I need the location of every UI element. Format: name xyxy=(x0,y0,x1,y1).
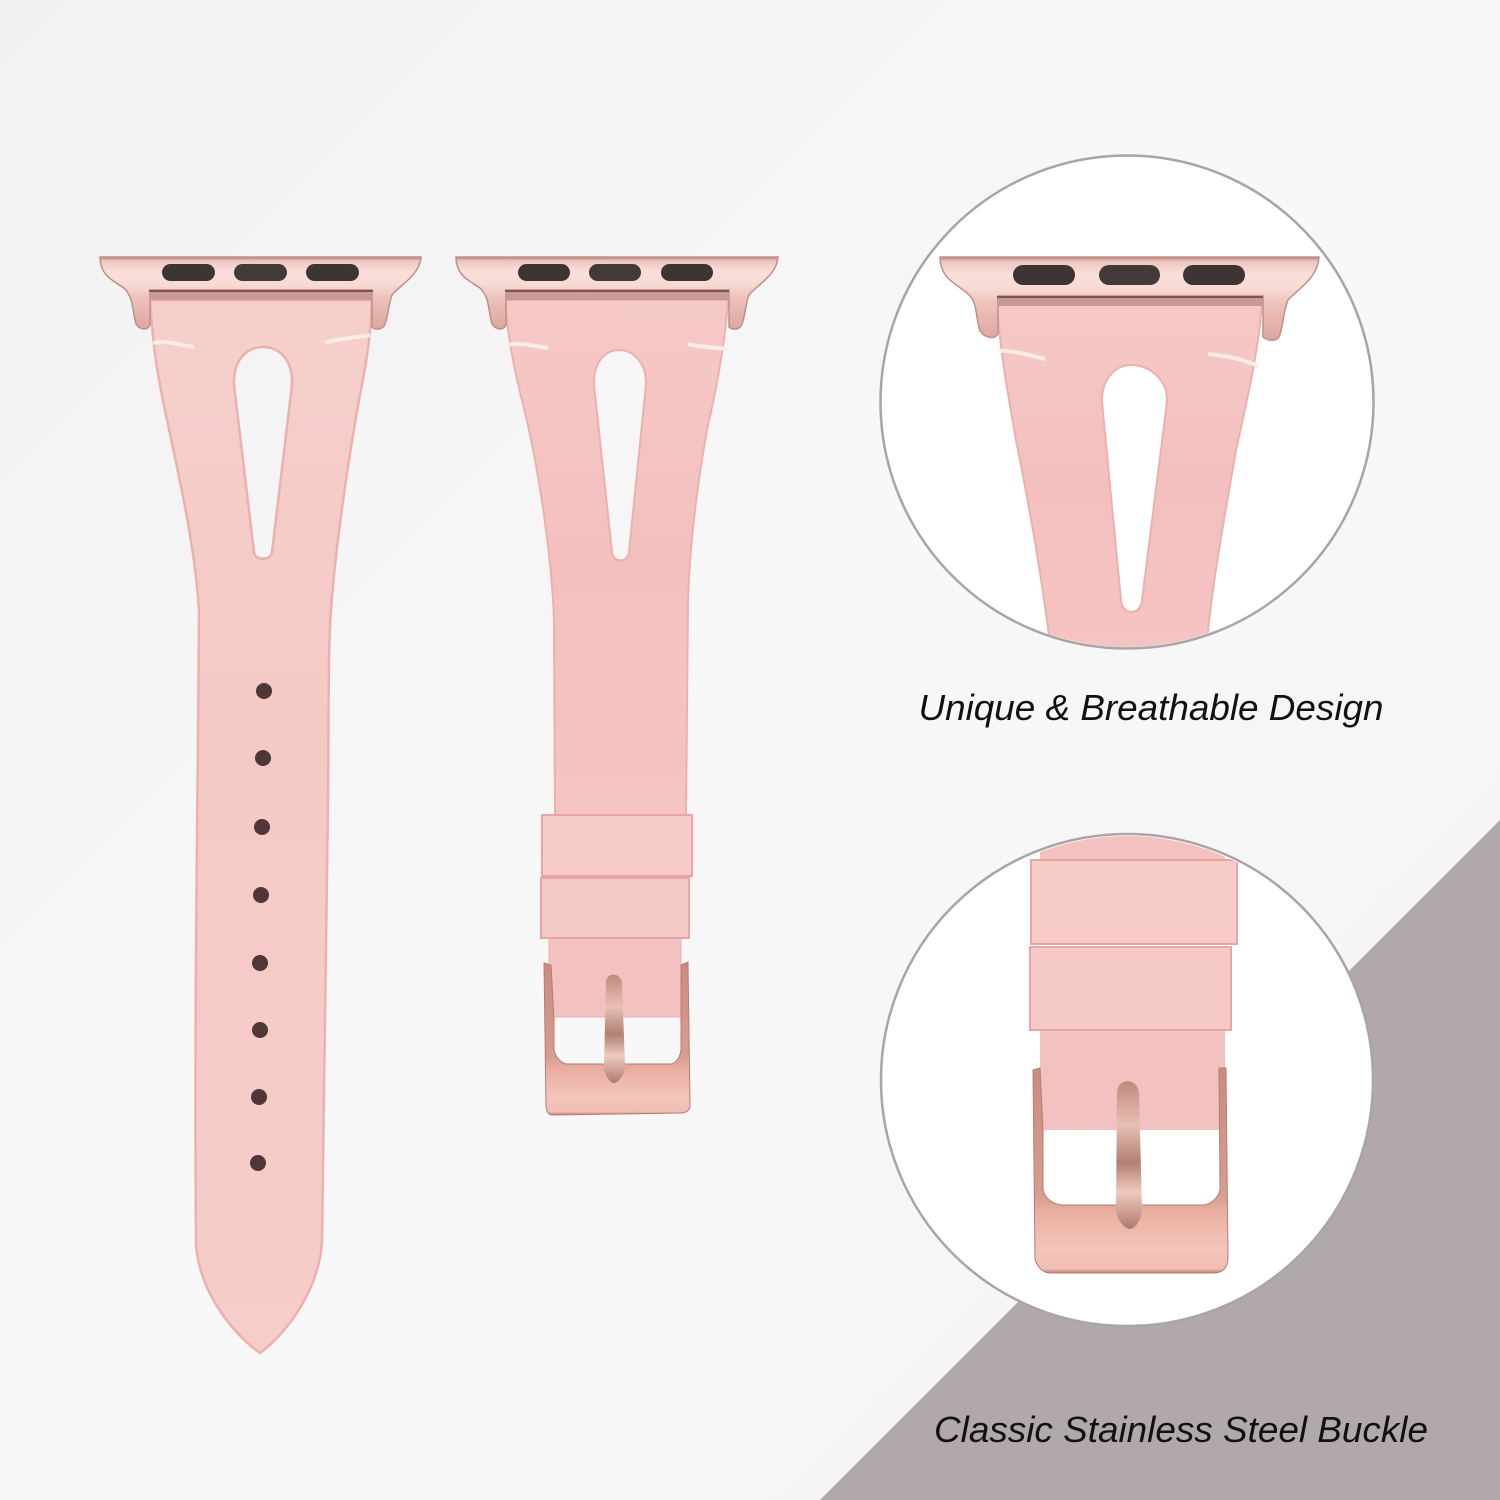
circle background xyxy=(880,156,1374,648)
keeper loop upper xyxy=(542,815,692,876)
buckle frame xyxy=(544,962,690,1115)
panel: breathable design circle xyxy=(880,156,1374,660)
connector: long strap xyxy=(100,257,421,329)
strap leather body xyxy=(150,300,372,1353)
connector: short strap xyxy=(456,257,778,329)
short strap with buckle xyxy=(505,300,728,1115)
stitching xyxy=(507,344,727,349)
zoomed connector xyxy=(940,257,1319,340)
caption: classic stainless steel buckle: Classic Stainless Steel Buckle xyxy=(934,1409,1428,1450)
keeper loop lower xyxy=(541,878,689,938)
panel: buckle circle xyxy=(881,830,1373,1326)
buckle pin xyxy=(604,974,625,1083)
lower strap section xyxy=(549,935,681,1017)
strap holes xyxy=(250,683,272,1171)
zoomed strap xyxy=(997,300,1262,660)
zoomed buckle pin xyxy=(1116,1081,1142,1229)
short strap leather body xyxy=(505,300,728,820)
zoomed buckle frame xyxy=(1033,1068,1228,1273)
grey corner triangle xyxy=(820,820,1500,1500)
stitching xyxy=(153,335,370,347)
long strap with keeper holes xyxy=(150,300,372,1353)
zoomed buckle strap xyxy=(1030,830,1237,1130)
circle background xyxy=(881,834,1373,1326)
caption: unique and breathable design: Unique & Breathable Design xyxy=(918,687,1384,728)
